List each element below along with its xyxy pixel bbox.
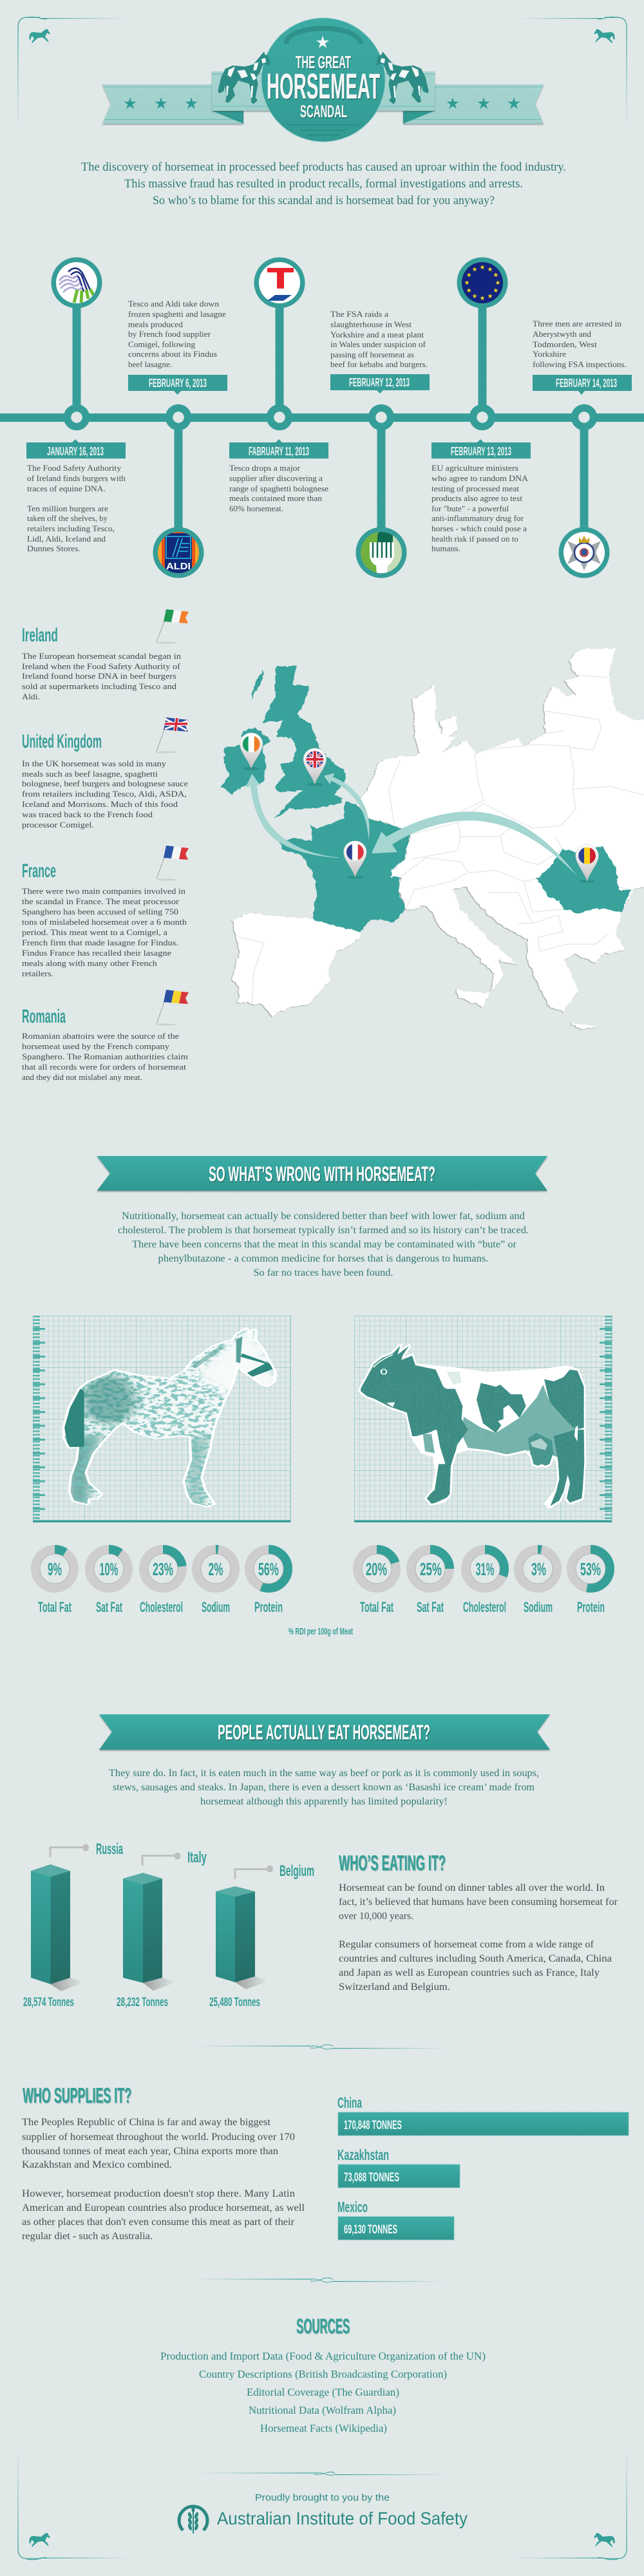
timeline text: february 12: The FSA raids a bbox=[330, 309, 388, 319]
arrow: france to uk bbox=[324, 773, 370, 840]
illustration: horse bbox=[64, 1327, 283, 1507]
donut labels: horse: Protein bbox=[254, 1599, 283, 1615]
timeline text: february 6: frozen spaghetti and lasagne bbox=[128, 309, 226, 319]
timeline text: february 12 bbox=[330, 309, 428, 369]
timeline text: february 12: slaughterhouse in West bbox=[330, 319, 412, 329]
text: ireland: The European horsemeat scandal began in bbox=[22, 652, 182, 661]
timeline text: january 16: Ten million burgers are bbox=[27, 504, 108, 513]
ribbon: folds bbox=[212, 111, 435, 124]
timeline text: february 6: concerns about its Findus bbox=[128, 349, 217, 359]
text: who supplies it: supplier of horsemeat throughout the world. Producing over 170 bbox=[22, 2132, 295, 2143]
icon: european union flag bbox=[457, 258, 507, 308]
map: country borders bbox=[239, 675, 644, 1003]
timeline text: february 11 bbox=[229, 463, 328, 513]
text: nutrition paragraph bbox=[118, 1211, 529, 1278]
divider bbox=[193, 2045, 448, 2049]
timeline text: february 13: products also agree to test bbox=[431, 493, 522, 503]
date tag: february 6: FEBRUARY 6, 2013 bbox=[149, 377, 207, 390]
decorative frame bottom right with horse bbox=[513, 2448, 627, 2560]
donut labels: cow: Sodium bbox=[524, 1599, 553, 1615]
text: romania: Spanghero. The Romanian authorities claim bbox=[22, 1052, 188, 1061]
donut labels: cow bbox=[360, 1599, 605, 1615]
donut values: horse bbox=[48, 1559, 279, 1579]
icon: aldi logo bbox=[153, 527, 204, 578]
text: ireland: Ireland found horse DNA in beef burgers bbox=[22, 672, 176, 681]
timeline text: january 16: Lidl, Aldi, Iceland and bbox=[27, 534, 106, 544]
timeline text: february 12: beef for kebabs and burgers. bbox=[330, 359, 428, 369]
text: ireland: Ireland when the Food Safety Authority of bbox=[22, 662, 181, 671]
timeline text: january 16: taken off the shelves, by bbox=[27, 513, 108, 523]
stars on ribbon bbox=[124, 97, 520, 109]
donut values: horse: 23% bbox=[153, 1559, 173, 1579]
title text bbox=[267, 52, 380, 121]
timeline text: february 6: meals produced bbox=[128, 319, 184, 329]
text: eating paragraph: horsemeat although this apparently has limited popularity! bbox=[200, 1796, 448, 1807]
donut labels: cow: Cholesterol bbox=[463, 1599, 506, 1615]
bar: russia bbox=[23, 1841, 123, 2009]
donut: sat fat 25% bbox=[411, 1549, 450, 1588]
donut labels: horse: Total Fat bbox=[38, 1599, 71, 1615]
text: france: Findus France has recalled their lasagne bbox=[22, 949, 172, 958]
map: france bbox=[279, 802, 410, 932]
panel: romania bbox=[22, 990, 189, 1082]
timeline text: february 11: range of spaghetti bolognese bbox=[229, 484, 328, 493]
timeline text: february 13: health risk if passed on to bbox=[431, 534, 518, 544]
text: nutrition paragraph: So far no traces have been found. bbox=[254, 1267, 393, 1278]
donut: total fat 20% bbox=[357, 1549, 396, 1588]
organisation name: Australian Institute of Food Safety bbox=[217, 2508, 468, 2528]
heading: ireland: Ireland bbox=[22, 625, 58, 646]
text: united kingdom bbox=[22, 759, 189, 829]
text: who's eating it: over 10,000 years. bbox=[339, 1911, 413, 1922]
text: sources list: Horsemeat Facts (Wikipedia) bbox=[260, 2422, 387, 2434]
bar: mexico: 69,130 TONNES bbox=[344, 2223, 397, 2237]
bar: china: 170,848 TONNES bbox=[344, 2119, 402, 2132]
text: ireland bbox=[22, 652, 182, 701]
timeline text: february 13: for "bute" - a powerful bbox=[431, 504, 509, 513]
text: who supplies it: American and European countries also produce horsemeat, as well bbox=[22, 2202, 305, 2213]
donut values: cow: 25% bbox=[420, 1559, 442, 1579]
timeline bbox=[0, 258, 644, 578]
timeline text: january 16 bbox=[27, 463, 126, 553]
text: who's eating it: countries and cultures including South America, Canada, China bbox=[339, 1953, 612, 1964]
icon: uk flag bbox=[156, 717, 189, 753]
text: eating paragraph: They sure do. In fact, it is eaten much in the same way as beef or pork as it is commonly used in soups, bbox=[109, 1768, 539, 1779]
panel: united kingdom bbox=[22, 717, 189, 829]
text: united kingdom: from retailers including Tesco, Aldi, ASDA, bbox=[22, 790, 187, 799]
icon: right horse bbox=[376, 52, 429, 104]
panel: france bbox=[22, 846, 189, 978]
text: united kingdom: processor Comigel. bbox=[22, 820, 94, 829]
grid panel: horse bbox=[33, 1316, 290, 1522]
bar: belgium bbox=[209, 1862, 314, 2009]
icon: left horse bbox=[218, 52, 270, 104]
donut labels: horse bbox=[38, 1599, 283, 1615]
icon: food safety authority of ireland logo bbox=[52, 258, 102, 308]
timeline text: february 11: Tesco drops a major bbox=[229, 463, 301, 473]
date tag: january 16: JANUARY 16, 2013 bbox=[47, 445, 104, 458]
text: romania: and they did not mislabel any meat. bbox=[22, 1073, 142, 1082]
timeline text: february 13: who agree to random DNA bbox=[431, 473, 529, 483]
title badge bbox=[102, 18, 544, 142]
arrow: france to ireland bbox=[245, 774, 338, 858]
text: france: period. This meat went to a Comigel, a bbox=[22, 928, 168, 937]
text: romania: horsemeat used by the French company bbox=[22, 1042, 170, 1051]
timeline text: february 14: following FSA inspections. bbox=[533, 359, 627, 369]
icon: romania flag bbox=[156, 990, 189, 1025]
donut values: cow: 3% bbox=[531, 1559, 546, 1579]
timeline text: february 13: humans. bbox=[431, 544, 460, 553]
text: who's eating it: Switzerland and Belgium. bbox=[339, 1982, 450, 1993]
text: ireland: sold at supermarkets including Tesco and bbox=[22, 682, 177, 691]
heading: sources: SOURCES bbox=[296, 2315, 350, 2338]
text: france: French firm that made lasagne for Findus. bbox=[22, 938, 178, 947]
donut charts: horse bbox=[35, 1549, 288, 1615]
timeline text: february 14: Yorkshire bbox=[533, 349, 566, 359]
heading: romania: Romania bbox=[22, 1006, 66, 1027]
text: france: tons of mislabeled horsemeat over a 6 month bbox=[22, 918, 187, 927]
date tag: february 11: FABRUARY 11, 2013 bbox=[249, 445, 309, 458]
text: united kingdom: Iceland and Morrisons. Much of this food bbox=[22, 800, 178, 809]
intro text bbox=[81, 160, 566, 207]
timeline text: february 12: Yorkshire and a meat plant bbox=[330, 330, 424, 339]
text: nutrition paragraph: phenylbutazone - a common medicine for horses that is dangerous to humans. bbox=[158, 1253, 488, 1264]
section banner: so what's wrong with horsemeat: SO WHAT’S WRONG WITH HORSEMEAT? bbox=[209, 1162, 435, 1186]
bar: belgium: Belgium bbox=[279, 1862, 314, 1880]
text: france: meals along with many other French bbox=[22, 959, 158, 968]
decorative frame top left with horse bbox=[18, 17, 126, 129]
text: united kingdom: bolognese, beef burgers and bolognese sauce bbox=[22, 779, 189, 788]
text: nutrition paragraph: cholesterol. The problem is that horsemeat typically isn’t farmed and so its history can’t be traced. bbox=[118, 1225, 529, 1236]
timeline text: february 11: 60% horsemeat. bbox=[229, 504, 283, 513]
text: united kingdom: In the UK horsemeat was sold in many bbox=[22, 759, 167, 768]
text: france: Spanghero has been accused of selling 750 bbox=[22, 907, 178, 916]
date tag: february 6 bbox=[128, 375, 227, 395]
bar: russia: 28,574 Tonnes bbox=[23, 1996, 74, 2009]
text: who's eating it: fact, it’s believed that humans have been consuming horsemeat for bbox=[339, 1897, 618, 1908]
timeline text: february 13 bbox=[431, 463, 529, 553]
oval badge bbox=[261, 18, 385, 142]
bar chart: top suppliers bbox=[337, 2094, 629, 2240]
donut charts: cow bbox=[357, 1549, 610, 1615]
heading: france: France bbox=[22, 860, 56, 882]
text: eating paragraph: stews, sausages and steaks. In Japan, there is even a dessert known as ‘Basashi ice cream’ made from bbox=[113, 1782, 535, 1793]
text: who's eating it: Regular consumers of horsemeat come from a wide range of bbox=[339, 1939, 594, 1950]
text: who's eating it: and Japan as well as European countries such as France, Italy bbox=[339, 1967, 600, 1978]
date tag: february 12: FEBRUARY 12, 2013 bbox=[349, 376, 410, 389]
bar: italy: Italy bbox=[187, 1849, 207, 1866]
ribbon: left tail bbox=[102, 84, 243, 124]
heading: who supplies it: WHO SUPPLIES IT? bbox=[23, 2083, 131, 2107]
divider bbox=[197, 2472, 450, 2476]
donut values: horse: 2% bbox=[209, 1559, 223, 1579]
section banner: people actually eat horsemeat bbox=[99, 1714, 550, 1750]
heading: who's eating it: WHO’S EATING IT? bbox=[339, 1851, 446, 1875]
pin: romania bbox=[576, 844, 598, 883]
icon: police badge bbox=[559, 527, 609, 578]
text: who supplies it: as other places that don't even consume this meat as part of their bbox=[22, 2217, 295, 2228]
donut labels: horse: Sodium bbox=[202, 1599, 230, 1615]
bar: russia: Russia bbox=[96, 1841, 123, 1858]
map: white land bbox=[232, 649, 644, 1029]
timeline text: february 13: horses - which could pose a bbox=[431, 524, 527, 533]
text: france: retailers. bbox=[22, 969, 53, 978]
text: who supplies it bbox=[22, 2117, 305, 2242]
text: sources list: Nutritional Data (Wolfram Alpha) bbox=[249, 2404, 396, 2416]
bar: italy bbox=[117, 1849, 207, 2009]
donut: sodium 2% bbox=[196, 1549, 235, 1588]
timeline text: february 13: EU agriculture ministers bbox=[431, 463, 518, 473]
text: ireland: Aldi. bbox=[22, 692, 40, 701]
timeline text: february 6: beef lasagne. bbox=[128, 359, 172, 369]
heading: united kingdom: United Kingdom bbox=[22, 731, 102, 752]
text: sources list: Country Descriptions (British Broadcasting Corporation) bbox=[199, 2368, 447, 2380]
grid panel: cow bbox=[354, 1316, 612, 1522]
intro text: The discovery of horsemeat in processed beef products has caused an uproar within the food industry. bbox=[81, 160, 566, 174]
divider bbox=[193, 2278, 448, 2282]
text: who supplies it: regular diet - such as Australia. bbox=[22, 2231, 153, 2242]
timeline text: january 16: retailers including Tesco, bbox=[27, 524, 115, 533]
date tag: february 14 bbox=[533, 375, 632, 395]
donut: protein 53% bbox=[571, 1549, 610, 1588]
bar: china: China bbox=[337, 2094, 362, 2111]
donut: sodium 3% bbox=[518, 1549, 557, 1588]
pin: united kingdom bbox=[303, 748, 327, 786]
donut: protein 56% bbox=[249, 1549, 288, 1588]
panel: ireland bbox=[22, 609, 189, 701]
chart: cow on grid bbox=[354, 1316, 612, 1522]
text: sources list bbox=[160, 2350, 486, 2434]
text: who's eating it: Horsemeat can be found on dinner tables all over the world. In bbox=[339, 1882, 605, 1893]
donut labels: cow: Sat Fat bbox=[417, 1599, 444, 1615]
timeline text: february 11: meals contained more than bbox=[229, 493, 323, 503]
donut labels: cow: Protein bbox=[577, 1599, 605, 1615]
map: united kingdom bbox=[251, 666, 346, 819]
donut: total fat 9% bbox=[35, 1549, 74, 1588]
bar: china bbox=[337, 2094, 629, 2136]
donut values: horse: 56% bbox=[258, 1559, 279, 1579]
ribbon: centre band bbox=[212, 71, 435, 111]
text: sources list: Editorial Coverage (The Guardian) bbox=[247, 2386, 399, 2398]
timeline text: february 14: Three men are arrested in bbox=[533, 319, 622, 328]
donut labels: cow: Total Fat bbox=[360, 1599, 393, 1615]
text: romania bbox=[22, 1032, 188, 1082]
intro text: So who’s to blame for this scandal and is horsemeat bad for you anyway? bbox=[153, 194, 495, 207]
timeline text: february 14 bbox=[533, 319, 627, 369]
text: united kingdom: meals such as beef lasagne, spaghetti bbox=[22, 770, 158, 779]
pin: france bbox=[343, 841, 366, 878]
map of europe bbox=[220, 649, 644, 1029]
timeline text: january 16: of Ireland finds burgers with bbox=[27, 473, 126, 483]
pin: ireland bbox=[240, 733, 263, 770]
credit: australian institute of food safety bbox=[179, 2492, 468, 2533]
illustration: cow bbox=[361, 1333, 585, 1508]
donut: sat fat 10% bbox=[90, 1549, 128, 1588]
timeline text: february 12: passing off horsemeat as bbox=[330, 350, 414, 359]
map: ireland bbox=[220, 728, 271, 795]
date tag: february 13: FEBRUARY 13, 2013 bbox=[451, 445, 511, 458]
timeline text: february 6: Comigel, following bbox=[128, 339, 195, 349]
credit line: Proudly brought to you by the bbox=[255, 2492, 390, 2503]
text: sources list: Production and Import Data (Food & Agriculture Organization of the UN) bbox=[160, 2350, 486, 2362]
icon: fork logo bbox=[355, 527, 407, 578]
text: france: There were two main companies involved in bbox=[22, 887, 186, 896]
text: who supplies it: Kazakhstan and Mexico combined. bbox=[22, 2159, 172, 2170]
ribbon: right tail bbox=[403, 84, 544, 124]
timeline text: february 6: by French food supplier bbox=[128, 329, 211, 339]
donut values: cow: 53% bbox=[580, 1559, 601, 1579]
donut: cholesterol 31% bbox=[466, 1549, 504, 1588]
timeline text: february 12: in Wales under suspicion of bbox=[330, 339, 426, 349]
text: who supplies it: However, horsemeat production doesn't stop there. Many Latin bbox=[22, 2188, 295, 2199]
bar: kazakhstan: 73,088 TONNES bbox=[344, 2171, 399, 2184]
bar: mexico bbox=[337, 2199, 454, 2240]
chart footnote: % RDI per 100g of Meat bbox=[289, 1626, 353, 1637]
donut values: horse: 9% bbox=[48, 1559, 62, 1579]
timeline text: january 16: Dunnes Stores. bbox=[27, 544, 80, 553]
text: france: the scandal in France. The meat processor bbox=[22, 897, 180, 906]
bar: kazakhstan: Kazakhstan bbox=[337, 2146, 389, 2163]
text: who supplies it: The Peoples Republic of China is far and away the biggest bbox=[22, 2117, 271, 2128]
donut labels: horse: Sat Fat bbox=[96, 1599, 122, 1615]
timeline text: february 6: Tesco and Aldi take down bbox=[128, 299, 220, 308]
icon: aldi logo: ALDI bbox=[166, 561, 191, 572]
timeline text: february 6 bbox=[128, 299, 226, 369]
chart: horse on grid bbox=[33, 1316, 290, 1522]
text: who's eating it bbox=[339, 1882, 618, 1993]
date tag: january 16 bbox=[26, 439, 126, 459]
timeline text: february 14: Todmorden, West bbox=[533, 339, 597, 349]
title text: THE GREAT bbox=[296, 52, 351, 72]
bar: italy: 28,232 Tonnes bbox=[117, 1996, 168, 2009]
decorative frame bottom left with horse bbox=[18, 2448, 131, 2560]
donut values: cow: 20% bbox=[366, 1559, 387, 1579]
bar: belgium: 25,480 Tonnes bbox=[209, 1996, 260, 2009]
icon: france flag bbox=[156, 846, 189, 881]
text: united kingdom: was traced back to the French food bbox=[22, 810, 153, 819]
text: romania: Romanian abattoirs were the source of the bbox=[22, 1032, 180, 1041]
timeline axis and stems bbox=[0, 303, 644, 531]
icon: wheat logo bbox=[179, 2505, 207, 2533]
text: eating paragraph bbox=[109, 1768, 539, 1807]
title text: SCANDAL bbox=[300, 102, 347, 121]
text: nutrition paragraph: There have been concerns that the meat in this scandal may be contaminated with “bute” or bbox=[132, 1239, 517, 1250]
title badge: HORSEMEAT bbox=[267, 66, 380, 106]
donut: cholesterol 23% bbox=[144, 1549, 182, 1588]
bar: kazakhstan bbox=[337, 2146, 460, 2188]
text: romania: that all records were for orders of horsemeat bbox=[22, 1063, 187, 1072]
text: who supplies it: thousand tonnes of meat each year, China exports more than bbox=[22, 2146, 278, 2157]
date tag: february 12 bbox=[330, 374, 430, 393]
timeline nodes bbox=[67, 408, 594, 426]
bar: mexico: Mexico bbox=[337, 2199, 368, 2215]
decorative frame top right with horse bbox=[517, 17, 627, 129]
donut values: horse: 10% bbox=[99, 1559, 118, 1579]
section banner: people actually eat horsemeat: PEOPLE ACTUALLY EAT HORSEMEAT? bbox=[218, 1721, 430, 1744]
arrow: romania to france bbox=[372, 811, 577, 876]
timeline text: january 16: traces of equine DNA. bbox=[27, 484, 106, 493]
intro text: This massive fraud has resulted in product recalls, formal investigations and arrests. bbox=[124, 177, 523, 191]
timeline text: february 13: testing of processed meat bbox=[431, 484, 519, 493]
donut values: cow bbox=[366, 1559, 601, 1579]
timeline text: february 13: anti-inflammatory drug for bbox=[431, 513, 524, 523]
timeline text: february 11: supplier after discovering a bbox=[229, 473, 323, 483]
donut labels: horse: Cholesterol bbox=[140, 1599, 183, 1615]
text: france bbox=[22, 887, 187, 978]
section banner: so what's wrong with horsemeat bbox=[97, 1156, 547, 1191]
bar chart: top consumers bbox=[23, 1841, 314, 2009]
text: nutrition paragraph: Nutritionally, horsemeat can actually be considered better than beef with lower fat, sodium and bbox=[122, 1211, 525, 1222]
date tag: february 13 bbox=[431, 439, 531, 459]
date tag: february 11 bbox=[229, 439, 328, 459]
map: romania bbox=[536, 846, 632, 913]
icon: ireland flag bbox=[156, 609, 189, 644]
timeline text: january 16: The Food Safety Authority bbox=[27, 463, 122, 473]
timeline text: february 14: Aberystwyth and bbox=[533, 329, 592, 339]
icon: tesco logo bbox=[254, 258, 305, 308]
donut values: cow: 31% bbox=[475, 1559, 495, 1579]
